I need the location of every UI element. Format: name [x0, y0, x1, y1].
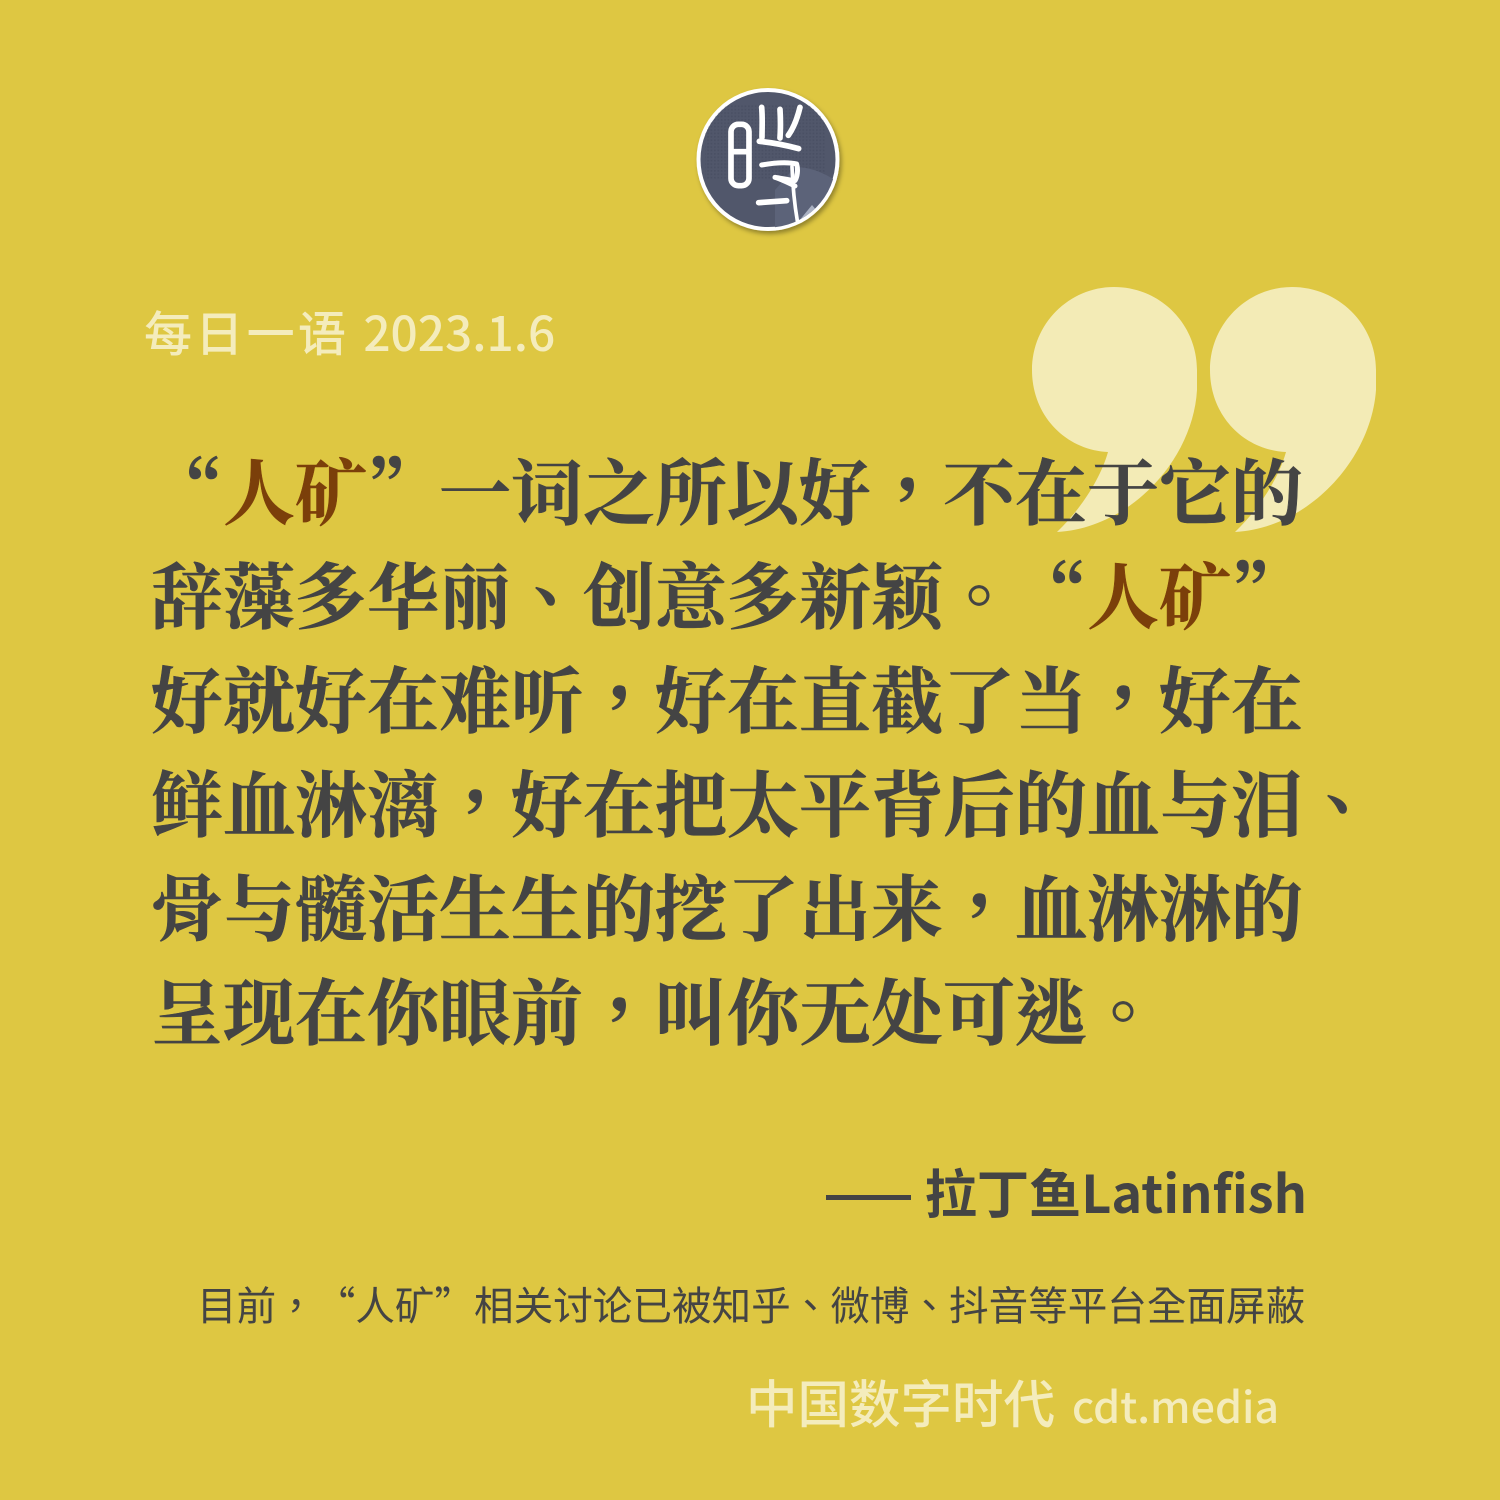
- note text: 目前，“人矿”相关讨论已被知乎、微博、抖音等平台全面屏蔽: [197, 1275, 1305, 1332]
- quote line 3: 好就好在难听，好在直截了当，好在: [151, 644, 1303, 748]
- quote line 5: 骨与髓活生生的挖了出来，血淋淋的: [151, 852, 1303, 956]
- attribution: 拉丁鱼Latinfish: [925, 1153, 1307, 1229]
- quote line 6: 呈现在你眼前，叫你无处可逃。: [151, 956, 1159, 1060]
- quote line 1: “人矿”一词之所以好，不在于它的: [151, 436, 1303, 540]
- quote text: [151, 436, 1375, 1060]
- quote line 2: 辞藻多华丽、创意多新颖。“人矿”: [151, 540, 1303, 644]
- date heading: 每日一语 2023.1.6: [144, 295, 555, 365]
- quote line 4: 鲜血淋漓，好在把太平背后的血与泪、: [151, 748, 1375, 852]
- logo badge: [696, 88, 844, 236]
- source footer: 中国数字时代 cdt.media: [746, 1363, 1279, 1438]
